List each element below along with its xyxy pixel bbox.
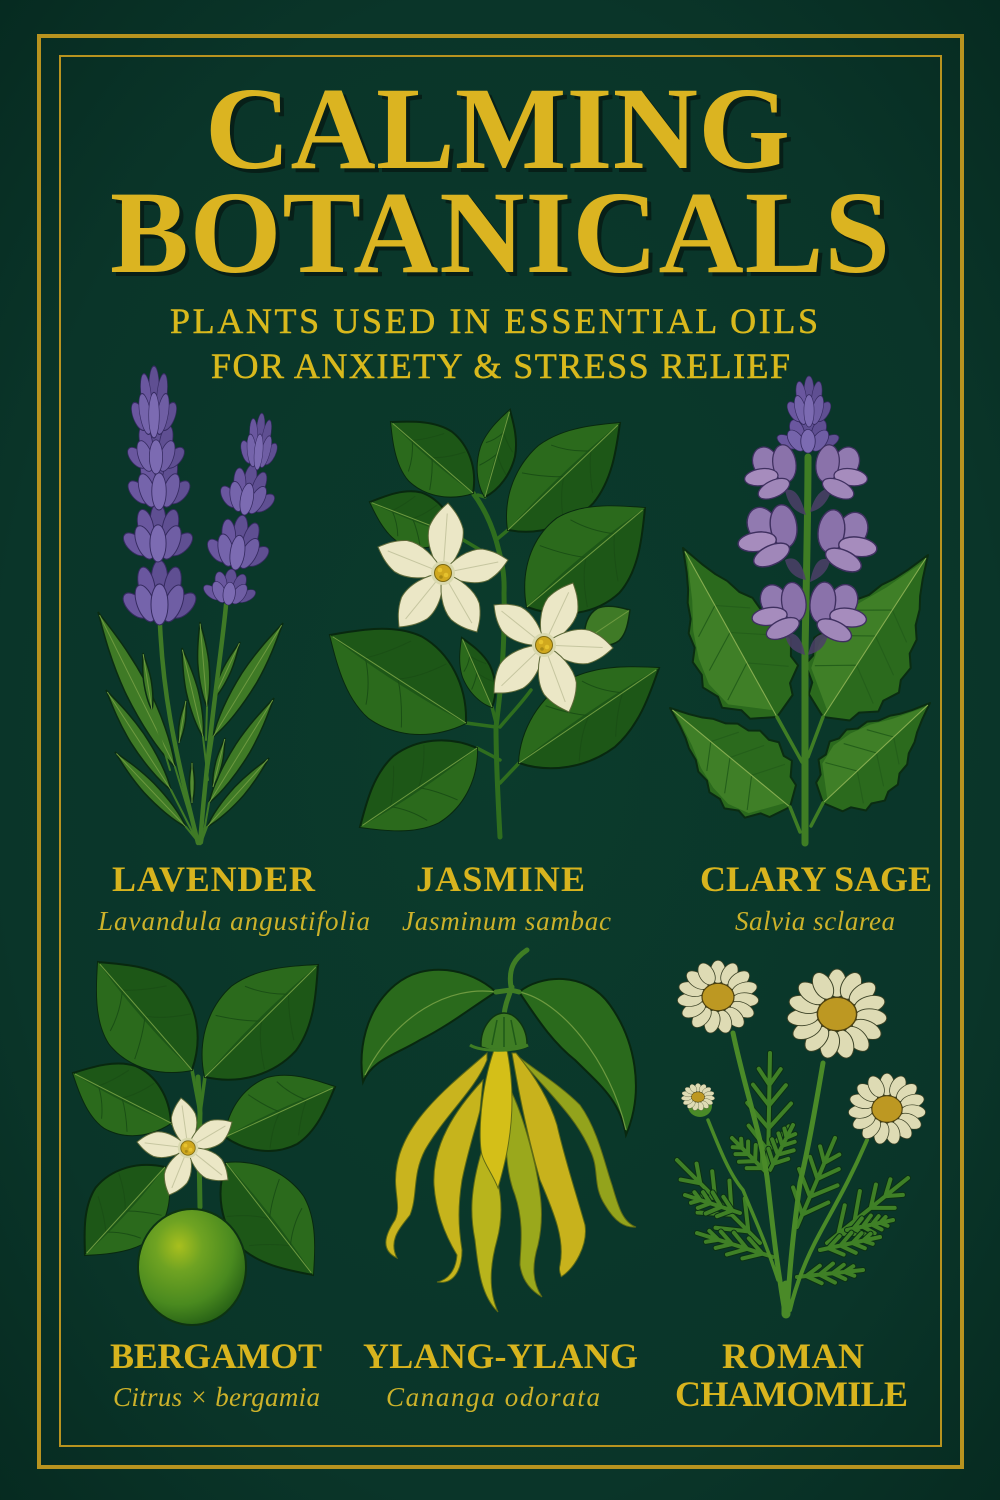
subtitle: FOR ANXIETY & STRESS RELIEF [211,346,790,386]
chamomile foliage [661,1053,920,1287]
label: roman chamomile: ROMAN [722,1336,864,1376]
latin names [97,906,895,1412]
sage flowers [737,443,878,646]
plant: jasmine [304,394,682,860]
plant: ylang-ylang [362,950,636,1312]
label: ylang-ylang: YLANG-YLANG [363,1336,638,1376]
ylang leaves [362,970,636,1135]
latin: jasmine: Jasminum sambac [402,906,611,936]
title: CALMING [205,63,790,194]
chamomile flower large [786,969,888,1060]
bergamot stems [171,1070,225,1207]
jasmine flower lower [482,576,614,718]
sage stems [777,457,823,843]
label: lavender: LAVENDER [112,859,316,899]
plant: bergamot [57,932,350,1325]
bergamot leaves [57,932,350,1300]
label: roman chamomile [675,1336,908,1414]
label: roman chamomile: CHAMOMILE [675,1374,908,1414]
ylang petals [386,1050,636,1312]
lavender stems [152,605,226,843]
labels [110,859,932,1414]
jasmine bud [574,594,641,656]
title [110,63,890,298]
sage leaves [639,523,970,840]
jasmine stems [455,493,531,837]
latin: bergamot: Citrus × bergamia [113,1382,320,1412]
bergamot flower [136,1096,238,1200]
ylang stem [496,950,527,1015]
latin: lavender: Lavandula angustifolia [97,906,370,936]
lavender right spike [199,411,283,608]
label: bergamot: BERGAMOT [110,1336,322,1376]
lavender leaves [88,607,291,832]
chamomile bud [681,1083,715,1117]
plant: roman chamomile [661,960,926,1314]
jasmine leaves [304,394,682,860]
plant: clary sage [639,376,970,843]
subtitle: PLANTS USED IN ESSENTIAL OILS [170,301,818,341]
chamomile flower right [848,1073,926,1145]
plant: lavender [88,366,291,843]
sage calyxes [785,488,832,655]
label: jasmine: JASMINE [416,859,585,899]
latin: clary sage: Salvia sclarea [735,906,895,936]
sage top spike [774,376,842,453]
chamomile stems [708,1033,867,1314]
bergamot fruit [138,1209,246,1325]
ylang calyx [470,1013,528,1051]
label: clary sage: CLARY SAGE [700,859,932,899]
subtitle [170,301,818,386]
lavender left spike [119,366,200,625]
latin: ylang-ylang: Cananga odorata [386,1382,600,1412]
chamomile flower upper left [677,960,759,1034]
title: BOTANICALS [110,167,890,298]
jasmine flower upper [372,502,511,640]
